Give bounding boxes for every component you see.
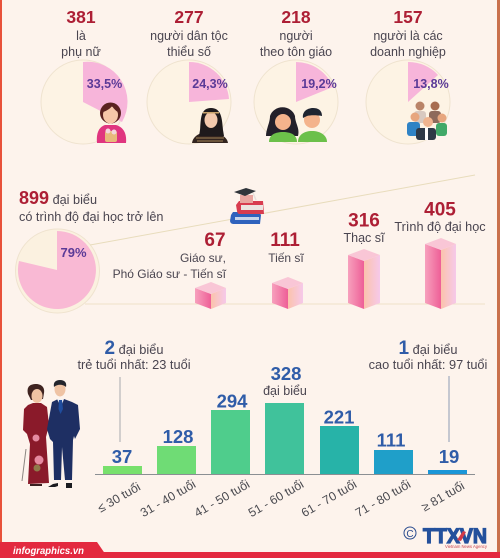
bar values: 37 [112,446,132,467]
label: religious: theo tôn giáo [260,45,332,59]
bar values: 111 [377,430,405,450]
percent: 19,2% [301,77,337,91]
icon: man and woman [266,107,327,142]
bar values: 328 [271,363,301,384]
baseline [85,303,485,305]
value 316: 316 [348,210,380,232]
label: Phó Giáo sư - Tiến sĩ [113,267,227,281]
age labels: ≥ 81 tuổi [419,479,467,514]
percent: 24,3% [192,77,228,91]
label: Trình độ đại học [394,220,486,234]
right border [497,0,500,552]
label: Giáo sư, [180,251,226,265]
logo: TTXVN: Vietnam News Agency [445,544,488,549]
pie: 33,5% [41,60,128,144]
heading: 899 delegates: 899 đại biểu [19,188,97,208]
icon: business people [407,102,447,140]
panel: religious [254,7,338,144]
stat: 157: 157 [393,7,423,27]
label: women: là [76,29,86,43]
label: religious: người [279,29,313,43]
age labels: ≤ 30 tuổi [95,480,143,515]
pie: 13,8% [366,60,450,144]
label: Thạc sĩ [344,231,385,245]
illustration: couple [22,380,80,488]
age labels: 31 - 40 tuổi [138,477,198,520]
heading: 899 delegates: có trình độ đại học trở lên [19,210,163,224]
icon: woman in pink [97,102,126,143]
connector line up [90,175,475,245]
label: ethnic minorities: người dân tộc [150,29,228,43]
bar values: 19 [439,446,459,467]
cube [425,238,456,309]
cube [195,282,226,309]
icon: ethnic woman [192,108,228,143]
age labels: 61 - 70 tuổi [299,477,359,520]
percent: 33,5% [87,77,122,91]
age labels: 51 - 60 tuổi [246,477,306,520]
logo: TTXVN: C [406,529,414,540]
text: trẻ tuổi nhất: 23 tuổi [77,357,191,372]
bar values [112,363,459,467]
panel: ethnic minorities [147,7,231,144]
age bar chart [95,363,475,520]
label: business: người là các [373,29,443,43]
text: 1 đại biểu [399,338,457,359]
cube [348,249,380,309]
label: women: phụ nữ [61,45,101,59]
footer bar [0,542,500,558]
left border [0,0,2,552]
icon: books and graduation cap [230,188,264,224]
value 67: 67 [204,230,226,251]
bar values: 294 [217,390,248,412]
stat: 218: 218 [281,7,311,27]
footer text: infographics.vn [13,545,84,557]
panel: business [366,7,450,144]
bar: 111 doctors [268,230,304,309]
label: delegates: đại biểu [263,384,307,398]
callout: oldest [369,338,487,442]
leader [448,376,450,442]
value 405: 405 [424,200,456,220]
stat: 277: 277 [174,7,204,27]
pie: 19,2% [254,60,338,144]
value 111: 111 [270,230,300,251]
callout: youngest [77,338,191,442]
age labels [95,477,467,520]
logo: TTXVN: TTXVN [423,525,487,548]
label: ethnic minorities: thiểu số [167,45,211,59]
bar values: 128 [163,426,193,447]
cube [272,277,303,309]
bar: 67 professors [113,230,227,309]
bar values: 221 [324,406,354,428]
pie: 24,3% [147,60,231,144]
percent: 13,8% [413,77,449,91]
age labels: 41 - 50 tuổi [192,477,252,520]
bar: 316 masters [344,210,385,309]
label: Tiến sĩ [268,251,304,265]
stat: 381: 381 [66,7,96,27]
text: 2 đại biểu [105,338,163,359]
panel: women [41,7,128,144]
percent 79%: 79% [60,245,87,260]
label: business: doanh nghiệp [370,45,446,59]
age labels: 71 - 80 tuổi [353,477,413,520]
leader [119,377,121,442]
pie: 79% [16,229,100,313]
bar: 405 university [394,200,486,309]
text: cao tuổi nhất: 97 tuổi [369,357,487,372]
